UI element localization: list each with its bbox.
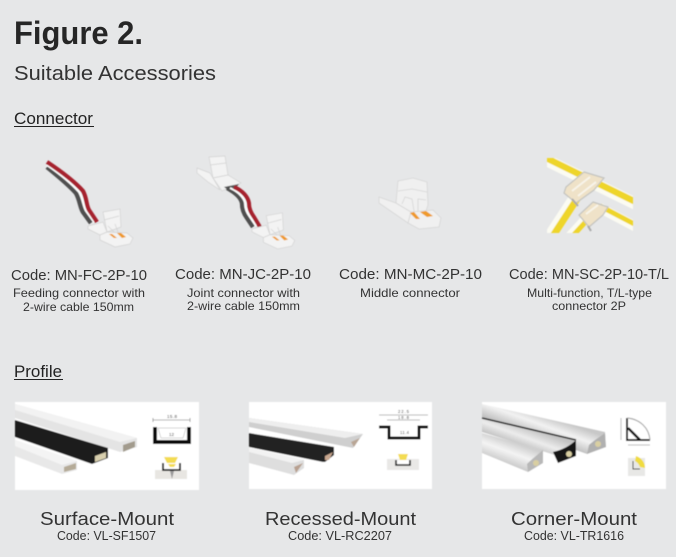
text: joint connector: Joint connector with	[187, 286, 300, 300]
text: recessed-mount label: Code: VL-RC2207	[288, 529, 392, 543]
icon: T/L connector	[546, 157, 634, 234]
text: joint connector: 2-wire cable 150mm	[187, 299, 300, 313]
text: corner-mount label: Code: VL-TR1616	[524, 529, 624, 543]
text: surface-mount label	[40, 508, 174, 543]
icon: feeding connector	[47, 162, 133, 247]
text: T/L connector: connector 2P	[552, 299, 626, 313]
panel: recessed-mount image: 18.8	[398, 415, 410, 420]
text: feeding connector: Code: MN-FC-2P-10	[11, 267, 147, 284]
text: middle connector	[339, 266, 482, 300]
text: T/L connector: Multi-function, T/L-type	[527, 286, 652, 300]
panel: surface-mount image: 12	[169, 432, 175, 437]
panel: recessed-mount image: 11.4	[400, 430, 410, 435]
panel: recessed-mount image: 22.5	[398, 409, 410, 414]
panel: surface-mount image	[15, 402, 199, 490]
text: feeding connector: 2-wire cable 150mm	[23, 300, 134, 314]
text: recessed-mount label: Recessed-Mount	[265, 508, 416, 529]
text: middle connector: Code: MN-MC-2P-10	[339, 266, 482, 283]
text: feeding connector	[11, 267, 147, 314]
subtitle: Suitable Accessories	[14, 62, 216, 85]
text: joint connector	[175, 266, 311, 313]
text: T/L connector: Code: MN-SC-2P-10-T/L	[509, 266, 669, 283]
text: corner-mount label	[511, 508, 637, 543]
heading: connector: Connector	[14, 109, 93, 128]
title: Figure 2.	[14, 15, 143, 51]
panel: corner-mount image	[482, 402, 666, 489]
icon: middle connector	[379, 178, 441, 229]
text: surface-mount label: Surface-Mount	[40, 508, 174, 529]
heading: profile: Profile	[14, 362, 62, 381]
text: middle connector: Middle connector	[360, 286, 460, 300]
text: recessed-mount label	[265, 508, 416, 543]
panel: recessed-mount image	[249, 402, 432, 489]
icon: joint connector	[197, 156, 295, 249]
text: surface-mount label: Code: VL-SF1507	[57, 529, 156, 543]
text: joint connector: Code: MN-JC-2P-10	[175, 266, 311, 283]
text: T/L connector	[509, 266, 669, 313]
text: feeding connector: Feeding connector with	[13, 286, 145, 300]
text: corner-mount label: Corner-Mount	[511, 508, 637, 529]
panel: surface-mount image: 15.8	[167, 414, 177, 419]
